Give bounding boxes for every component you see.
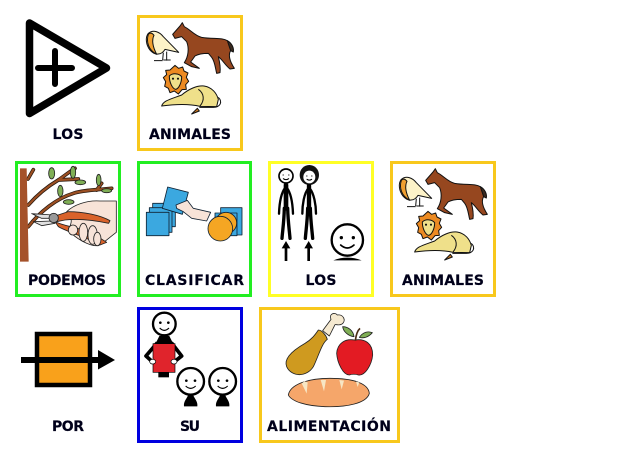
label: POR: POR xyxy=(52,419,84,435)
icon: chicken leg, apple and bread xyxy=(286,313,373,407)
frame xyxy=(16,162,120,296)
card: LOS (determiner, triangle with plus) xyxy=(30,23,106,143)
card: CLASIFICAR xyxy=(138,162,250,296)
icon: hand sorting squares and circles xyxy=(146,187,242,241)
frame xyxy=(138,16,242,150)
icon: two people with arrows and face xyxy=(279,165,363,261)
label: ANIMALES: ANIMALES xyxy=(402,273,484,289)
card: LOS (people) xyxy=(270,162,372,296)
label: LOS: LOS xyxy=(306,273,336,289)
card: SU xyxy=(138,308,242,442)
icon: triangle with plus sign xyxy=(30,23,106,114)
icon: bird, horse and lion xyxy=(146,23,234,114)
icon: bird, horse and lion xyxy=(399,169,487,260)
label: CLASIFICAR: CLASIFICAR xyxy=(145,273,244,289)
label: SU: SU xyxy=(180,419,200,435)
icon: pruning a tree branch xyxy=(20,166,116,262)
label: ALIMENTACIÓN: ALIMENTACIÓN xyxy=(267,417,391,435)
card: ANIMALES (second row) xyxy=(392,162,494,296)
card: POR xyxy=(21,334,115,435)
card: ALIMENTACIÓN xyxy=(260,308,398,442)
frame xyxy=(138,162,250,296)
label: PODEMOS: PODEMOS xyxy=(28,273,106,289)
label: ANIMALES: ANIMALES xyxy=(149,127,231,143)
frame xyxy=(270,162,372,296)
frame xyxy=(260,308,398,442)
icon: orange box with arrow xyxy=(21,334,115,385)
card: PODEMOS xyxy=(16,162,120,296)
label: LOS: LOS xyxy=(52,127,84,143)
card: ANIMALES (top row) xyxy=(138,16,242,150)
icon: person with book and two people xyxy=(146,313,236,406)
frame xyxy=(392,162,494,296)
frame xyxy=(138,308,242,442)
